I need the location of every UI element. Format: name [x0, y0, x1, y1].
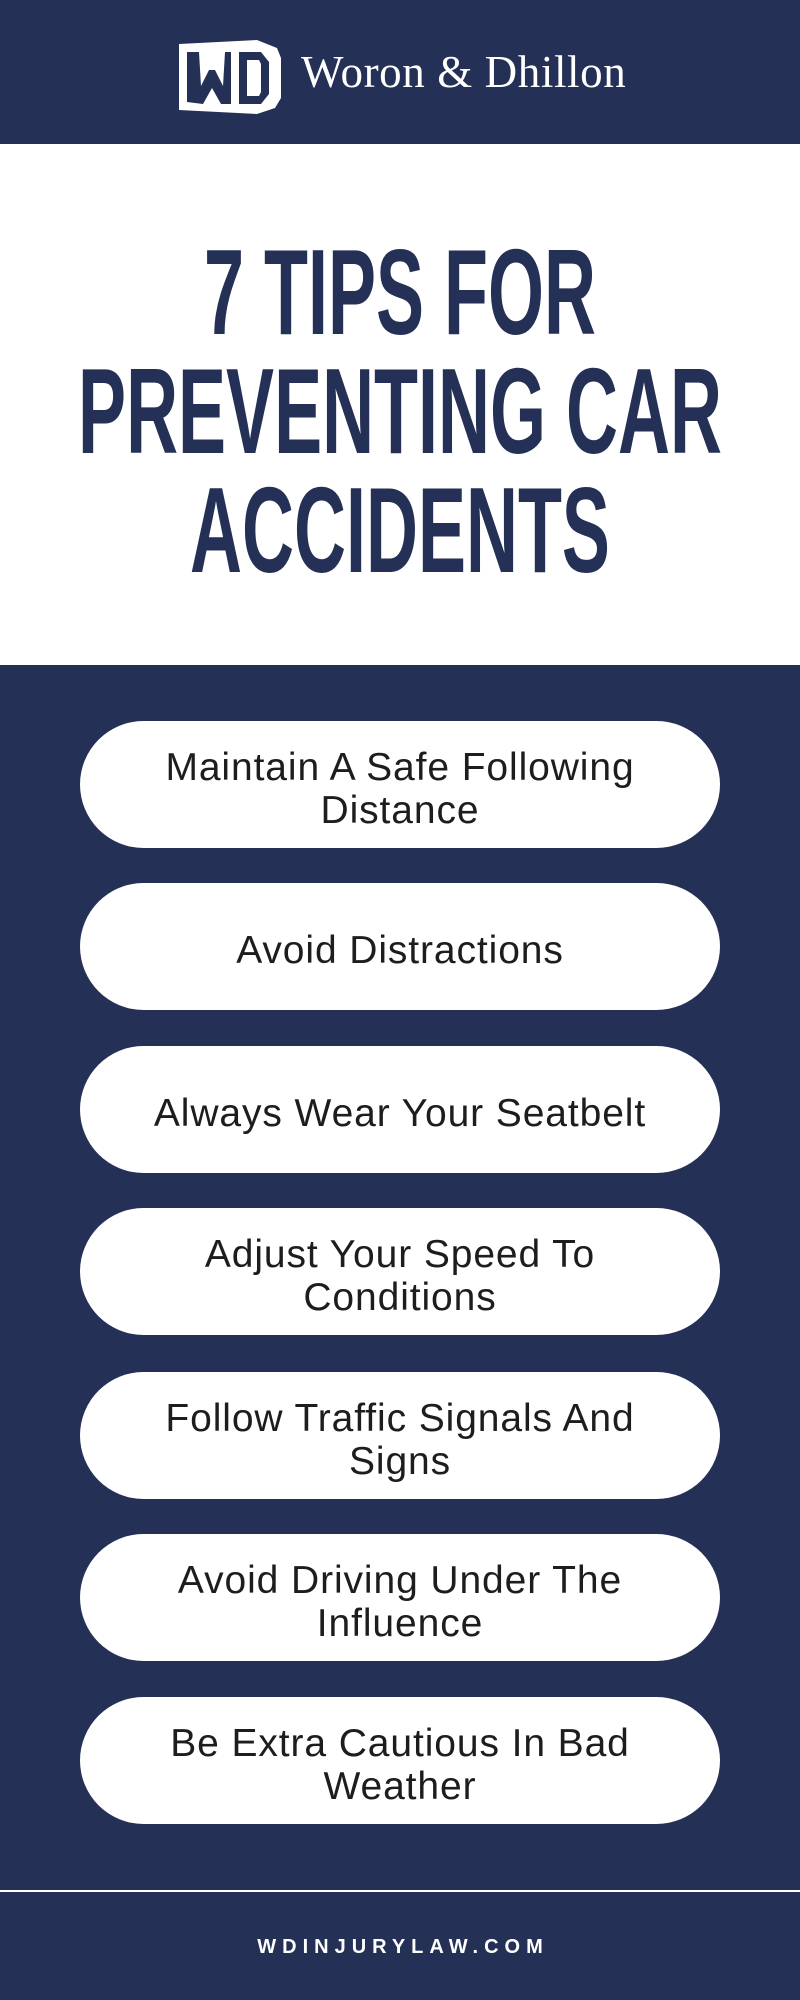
brand name: Woron & Dhillon	[301, 47, 626, 97]
header band	[0, 0, 800, 144]
tip 7: Be Extra Cautious In Bad Weather	[170, 1722, 630, 1808]
title: PREVENTING CAR	[78, 343, 722, 479]
tip 6: Avoid Driving Under The Influence	[178, 1558, 622, 1644]
title	[78, 233, 722, 593]
tip 3: Always Wear Your Seatbelt	[154, 1092, 646, 1135]
tip 4: Adjust Your Speed To Conditions	[205, 1232, 595, 1318]
tip 5: Follow Traffic Signals And Signs	[165, 1396, 635, 1482]
logo	[179, 40, 626, 114]
tip 1	[80, 721, 720, 848]
footer url: WDINJURYLAW.COM	[257, 1936, 549, 1958]
tip 2	[80, 883, 720, 1010]
tip 6	[80, 1534, 720, 1661]
tip 1: Maintain A Safe Following Distance	[165, 746, 635, 832]
tip 3	[80, 1046, 720, 1173]
tip 5	[80, 1372, 720, 1499]
tip 2: Avoid Distractions	[236, 929, 564, 972]
tip 4	[80, 1208, 720, 1335]
icon: WD mark	[179, 40, 281, 114]
tip 7	[80, 1697, 720, 1824]
